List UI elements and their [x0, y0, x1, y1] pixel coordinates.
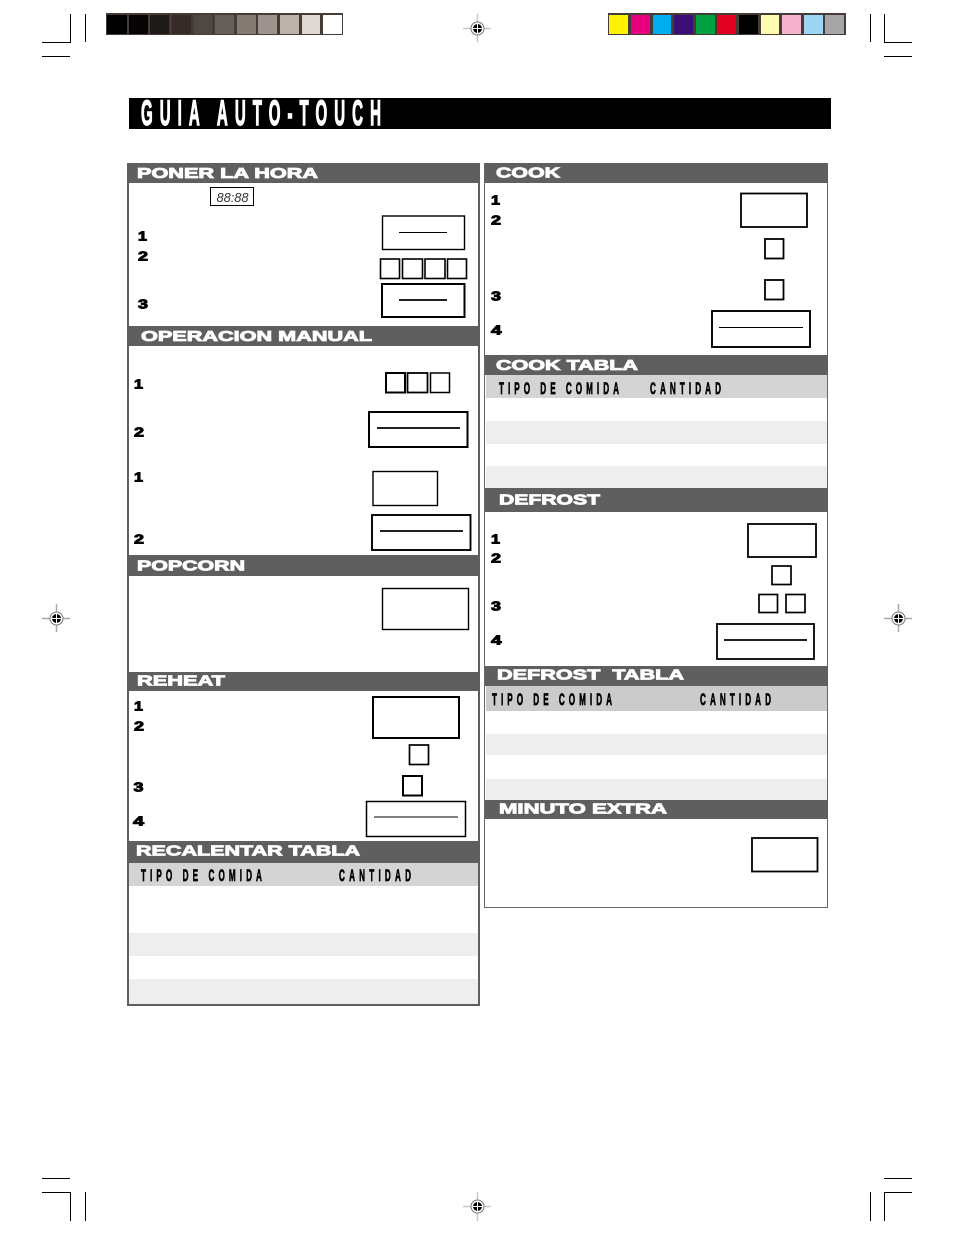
table: defrost: CANTIDAD: [700, 690, 771, 709]
crop marks: bottom right: [870, 1178, 912, 1221]
heading: minuto extra: MINUTO EXTRA: [499, 800, 667, 818]
table: defrost: TIPO DE COMIDA: [492, 690, 612, 709]
step numbers: defrost: [491, 532, 503, 648]
step numbers: operacion manual: 1: [134, 376, 143, 392]
process color bar: [608, 13, 846, 35]
heading: cook tabla: COOK TABLA: [496, 357, 638, 374]
button: popcorn: [382, 588, 468, 630]
heading: reheat: REHEAT: [137, 672, 225, 690]
heading: recalentar tabla: RECALENTAR TABLA: [136, 842, 360, 860]
table: recalentar: TIPO DE COMIDA: [141, 866, 262, 885]
registration mark: bottom: [463, 1192, 491, 1221]
button: defrost start: [717, 624, 814, 659]
step numbers: defrost: 4: [491, 632, 503, 648]
button: cook start: [712, 311, 810, 347]
step numbers: reheat: 3: [134, 780, 144, 794]
heading: popcorn: POPCORN: [137, 558, 245, 574]
button: cook: [741, 194, 807, 227]
table: cook: [486, 375, 827, 488]
step numbers: defrost: 2: [491, 550, 501, 566]
step numbers: poner la hora: 2: [138, 248, 148, 264]
heading: defrost tabla: [485, 666, 828, 686]
title banner: [129, 94, 831, 133]
table: recalentar: CANTIDAD: [339, 866, 411, 885]
button: manual start: [369, 412, 468, 447]
heading: operacion manual: OPERACION MANUAL: [141, 328, 372, 345]
button: manual power: [373, 472, 438, 506]
heading: cook: COOK: [496, 164, 560, 182]
button: reheat key: [410, 745, 428, 764]
step numbers: operacion manual: 1: [134, 470, 143, 484]
registration mark: right: [884, 604, 912, 632]
heading: defrost tabla: DEFROST TABLA: [497, 666, 684, 684]
step numbers: operacion manual: 2: [134, 424, 144, 440]
heading: poner la hora: PONER LA HORA: [137, 165, 318, 182]
panel: right column: [484, 163, 828, 908]
step numbers: cook: 4: [491, 322, 503, 338]
button: reheat start: [366, 802, 466, 836]
step numbers: poner la hora: [138, 228, 148, 312]
table: cook: CANTIDAD: [650, 379, 721, 398]
heading: cook tabla: [485, 355, 828, 375]
step numbers: poner la hora: 3: [138, 296, 148, 312]
step numbers: reheat: 4: [133, 814, 145, 828]
button: defrost: [748, 524, 816, 557]
step numbers: operacion manual: [134, 376, 144, 546]
clock display icon: 88:88: [216, 190, 249, 205]
title banner: GUIA AUTO-TOUCH: [141, 94, 381, 133]
step numbers: operacion manual: 2: [134, 532, 144, 546]
button: defrost key: [772, 566, 791, 584]
buttons: time keys: [386, 373, 450, 392]
step numbers: reheat: 1: [134, 698, 143, 714]
step numbers: cook: 3: [491, 288, 501, 304]
step numbers: cook: 2: [491, 212, 501, 228]
heading: popcorn: [127, 555, 480, 576]
heading: minuto extra: [485, 800, 828, 819]
crop marks: top right: [870, 14, 912, 56]
step numbers: reheat: [133, 698, 145, 828]
step numbers: defrost: 1: [491, 532, 500, 546]
heading: defrost: [485, 488, 828, 512]
panel: left column: [127, 163, 480, 1005]
button: reheat number: [403, 776, 422, 796]
heading: cook: [485, 163, 828, 183]
crop marks: top left: [42, 14, 86, 56]
clock display icon: [210, 188, 254, 206]
heading: operacion manual: [127, 326, 480, 346]
button: clock: [382, 216, 464, 250]
button: cook key: [765, 239, 784, 258]
button: minuto extra: [752, 838, 818, 872]
step numbers: cook: 1: [491, 192, 500, 208]
heading: recalentar tabla: [127, 841, 480, 863]
heading: poner la hora: [127, 163, 480, 183]
heading: defrost: DEFROST: [499, 492, 600, 508]
step numbers: reheat: 2: [134, 718, 144, 734]
step numbers: poner la hora: 1: [138, 228, 147, 244]
button: reheat: [373, 697, 459, 738]
button: clock confirm: [382, 284, 464, 317]
crop marks: bottom left: [42, 1178, 86, 1221]
registration mark: top: [463, 14, 491, 42]
buttons: number keys: [380, 259, 466, 278]
grayscale color bar: [106, 13, 343, 35]
table: cook: TIPO DE COMIDA: [499, 379, 619, 398]
heading: reheat: [127, 672, 480, 691]
step numbers: cook: [491, 192, 503, 338]
button: manual start second: [372, 515, 470, 550]
registration mark: left: [42, 604, 70, 632]
button: cook number: [765, 280, 784, 300]
table: recalentar: [129, 863, 478, 1004]
buttons: defrost numbers: [759, 594, 805, 612]
step numbers: defrost: 3: [491, 598, 501, 614]
table: defrost: [486, 686, 827, 800]
